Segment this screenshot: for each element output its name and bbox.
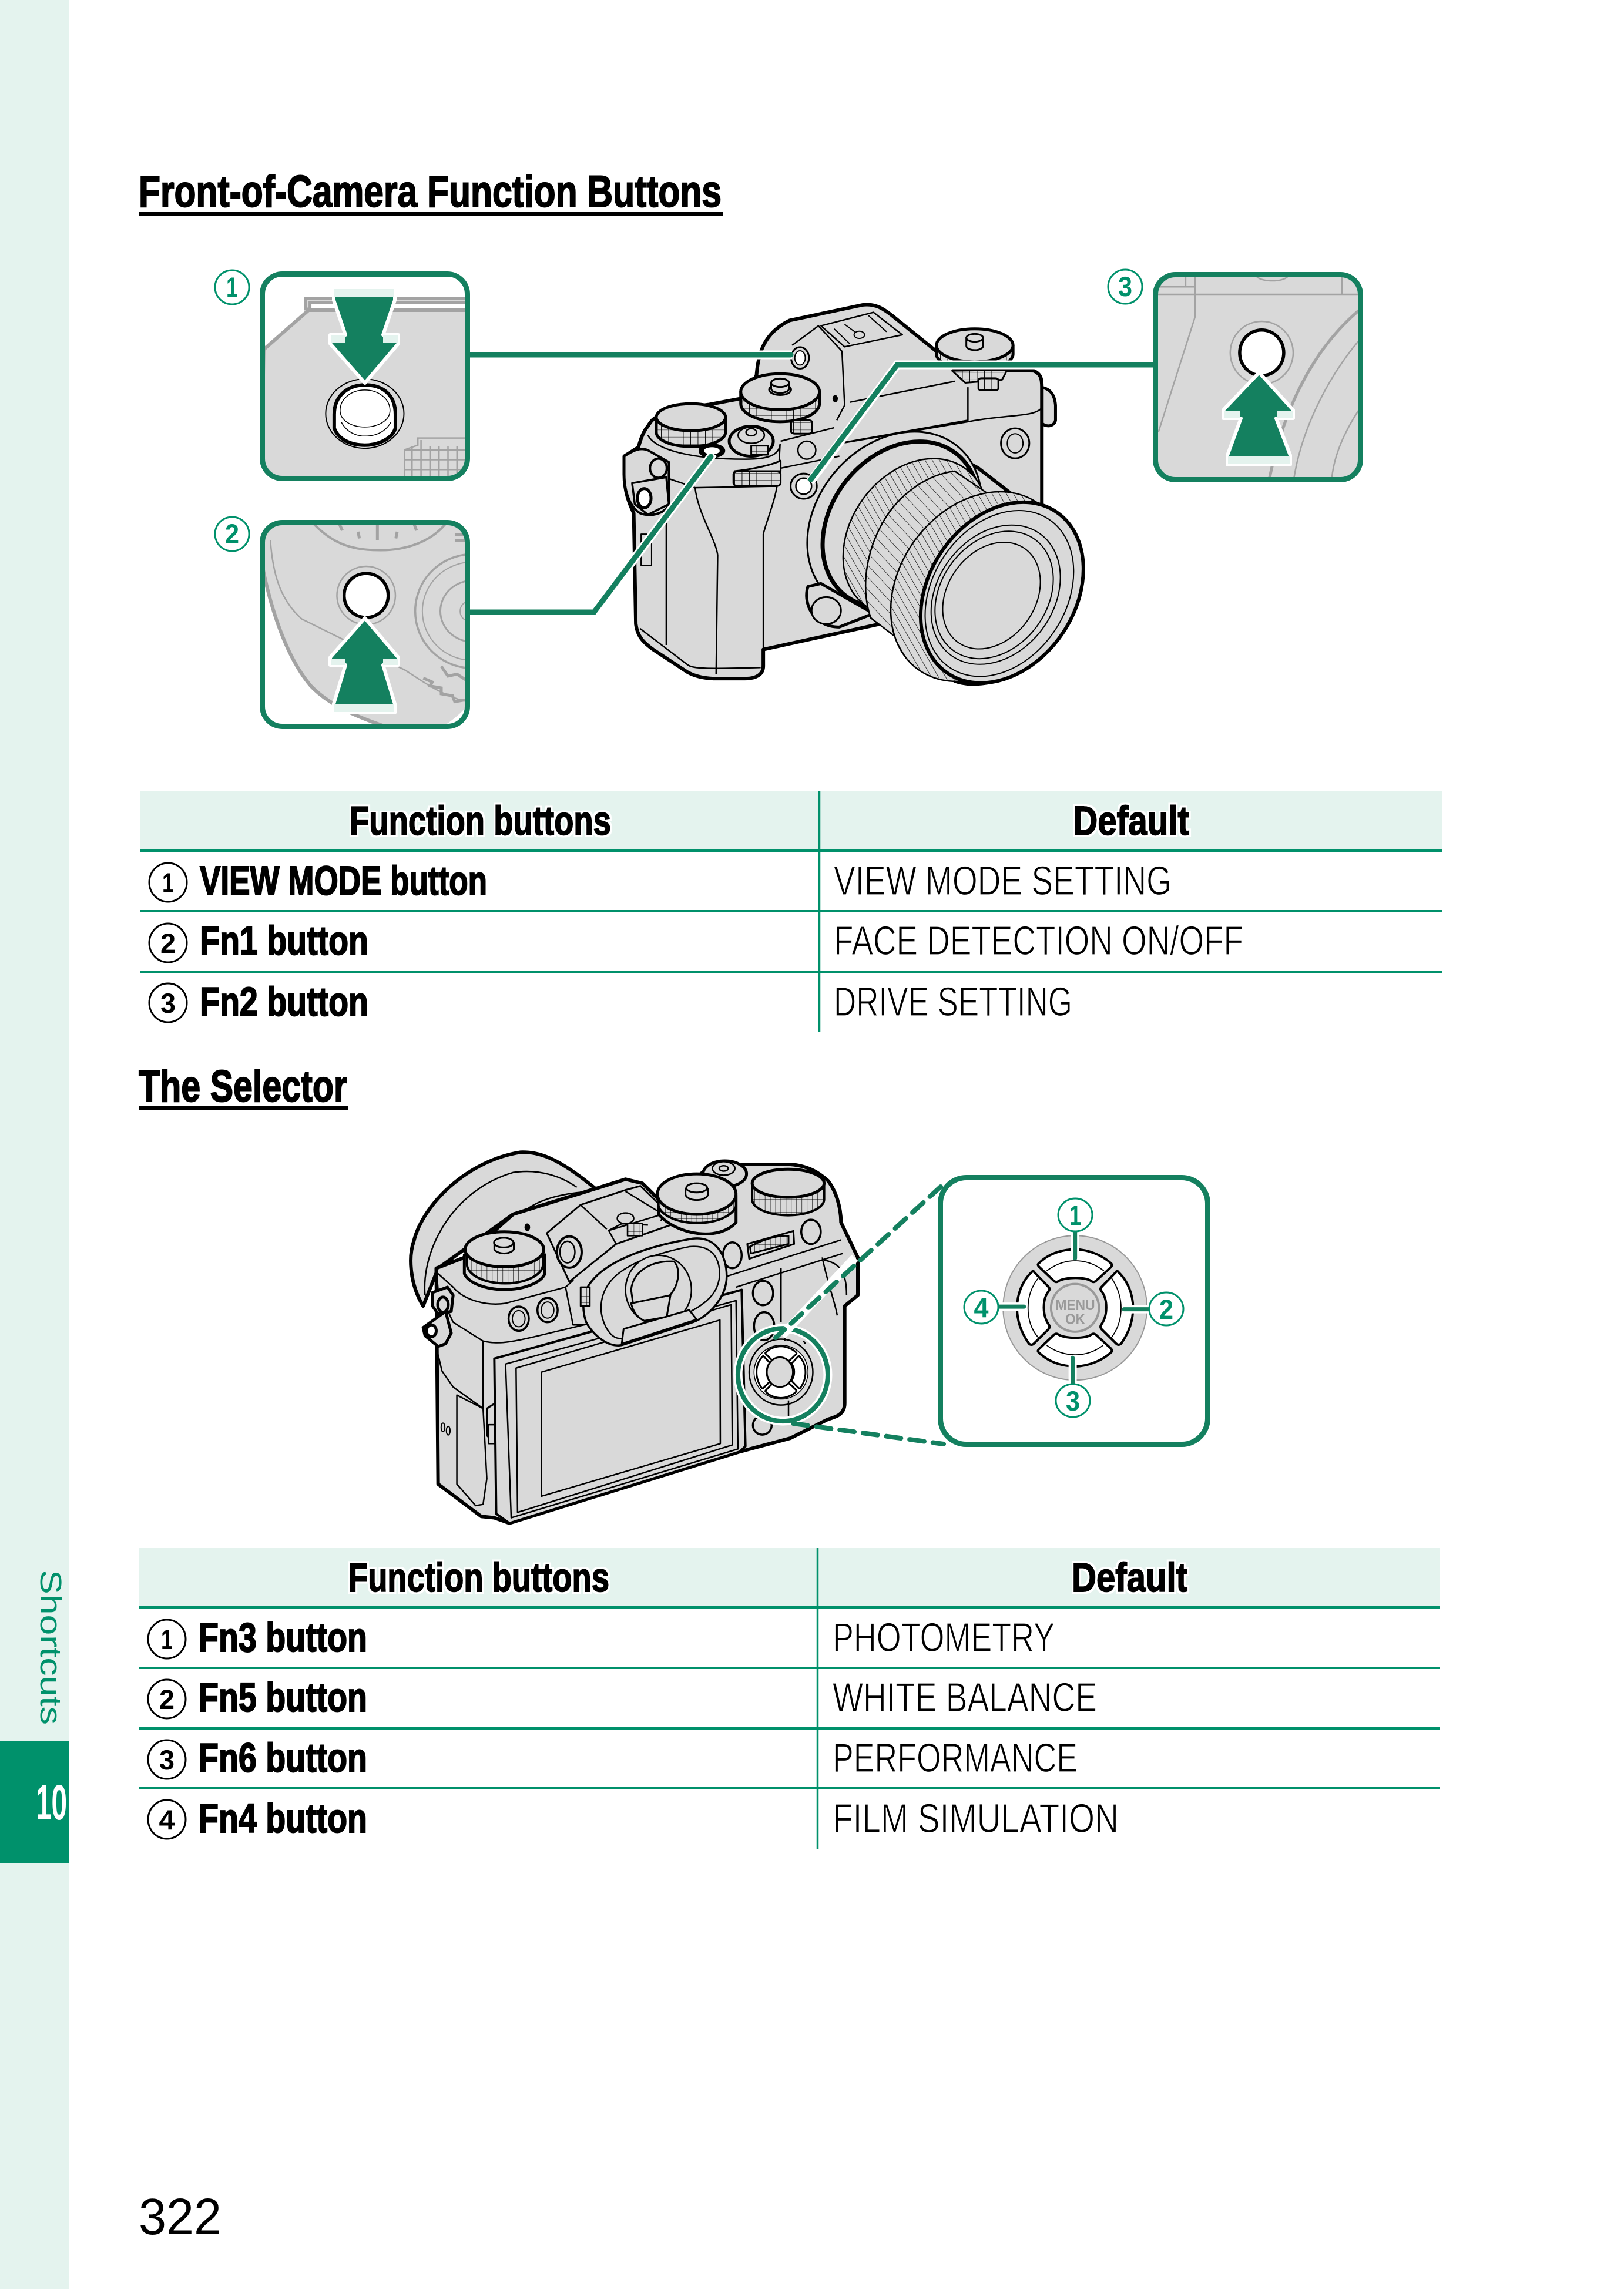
selector highlight [738, 1328, 828, 1421]
row 1 name: Fn3 button [199, 1614, 367, 1660]
row 1 number: 1 [161, 1624, 173, 1655]
row 4 name: Fn4 button [199, 1795, 367, 1841]
dials [464, 1255, 545, 1290]
selector callout 3: 3 [1066, 1385, 1080, 1416]
row 3 number [148, 1740, 186, 1779]
table 1 header: function buttons: Function buttons [350, 798, 611, 844]
callout 2: 2 [225, 518, 239, 549]
row 2 number: 2 [160, 928, 176, 959]
selector callout 2 [1149, 1292, 1183, 1325]
selector callout 1 [1058, 1198, 1092, 1231]
selector diagram [999, 1233, 1149, 1383]
panel 1: view mode detail [260, 271, 473, 481]
row 2 name: Fn5 button [199, 1674, 367, 1720]
leader line: view mode button [469, 350, 792, 360]
screen [494, 1290, 746, 1523]
row 2 number: 2 [159, 1684, 175, 1715]
row 4 number: 4 [159, 1804, 175, 1835]
callout 1: 1 [226, 271, 238, 303]
selector callout 1: 1 [1069, 1200, 1081, 1231]
row 3 default: PERFORMANCE [833, 1735, 1078, 1781]
row 4 number [148, 1800, 186, 1839]
hot shoe [547, 1186, 670, 1282]
callout 1 [215, 270, 249, 304]
table 2 header: function buttons: Function buttons [348, 1554, 609, 1600]
row 1 number [149, 863, 187, 902]
arrow: press down [330, 288, 398, 383]
selector callout 3 [1056, 1384, 1090, 1417]
rear camera illustration [411, 1152, 858, 1523]
row 1 default: PHOTOMETRY [833, 1614, 1055, 1660]
row 2 name: Fn1 button [200, 918, 368, 963]
row 3 number: 3 [160, 988, 176, 1019]
arrow: press up [1223, 372, 1293, 465]
selector callout 2: 2 [1159, 1294, 1173, 1325]
callout 2 [215, 517, 249, 551]
panel 3: fn2 detail [1153, 272, 1364, 483]
row 2 default: FACE DETECTION ON/OFF [834, 918, 1243, 963]
leaders [999, 1233, 1149, 1383]
strap lug [432, 1287, 453, 1314]
row 3 name: Fn6 button [199, 1735, 367, 1781]
row 2 number [149, 924, 187, 962]
chapter tab [0, 1741, 69, 1863]
page number: 322 [139, 2188, 222, 2245]
row 3 name: Fn2 button [200, 979, 368, 1025]
dials [656, 417, 726, 446]
callout 3 [1108, 270, 1142, 304]
heading: the selector: The Selector [139, 1062, 347, 1112]
selector on body [749, 1339, 813, 1405]
heading: front-of-camera: Front-of-Camera Function Buttons [139, 167, 722, 217]
selector callout 4 [964, 1291, 998, 1324]
front camera illustration [625, 304, 1106, 690]
center button label: OK [1065, 1311, 1085, 1328]
row 3 number: 3 [159, 1744, 175, 1775]
selector callout 4: 4 [974, 1292, 988, 1323]
leader line: fn1 button [469, 454, 713, 612]
row 2 default: WHITE BALANCE [833, 1674, 1097, 1720]
table 2 [139, 1548, 1440, 1849]
arrow: press up [330, 618, 398, 713]
table 2 header: default: Default [1072, 1554, 1187, 1600]
row 4 default: FILM SIMULATION [833, 1795, 1119, 1841]
row 1 default: VIEW MODE SETTING [834, 858, 1172, 904]
eyecup [583, 1238, 727, 1345]
chapter name: Shortcuts [34, 1570, 68, 1725]
panel 2: fn1 detail [260, 520, 470, 729]
callout 3: 3 [1118, 271, 1132, 302]
center button label: MENU [1055, 1297, 1095, 1314]
row 3 default: DRIVE SETTING [834, 979, 1072, 1025]
leader line: fn2 button [810, 365, 1154, 482]
chapter tab: 10 [36, 1775, 67, 1830]
table 1 header: default: Default [1073, 798, 1189, 844]
center button label [1055, 1297, 1095, 1328]
row 1 number [148, 1620, 186, 1658]
sidebar [0, 0, 69, 2289]
row 1 number: 1 [162, 867, 174, 898]
row 2 number [148, 1680, 186, 1718]
buttons [509, 1307, 529, 1331]
table 1 [140, 791, 1442, 1032]
lens [840, 441, 1078, 684]
row 3 number [149, 983, 187, 1022]
row 1 name: VIEW MODE button [200, 858, 487, 904]
dashed zoom lines [776, 1187, 944, 1444]
selector detail panel [940, 1177, 1208, 1444]
